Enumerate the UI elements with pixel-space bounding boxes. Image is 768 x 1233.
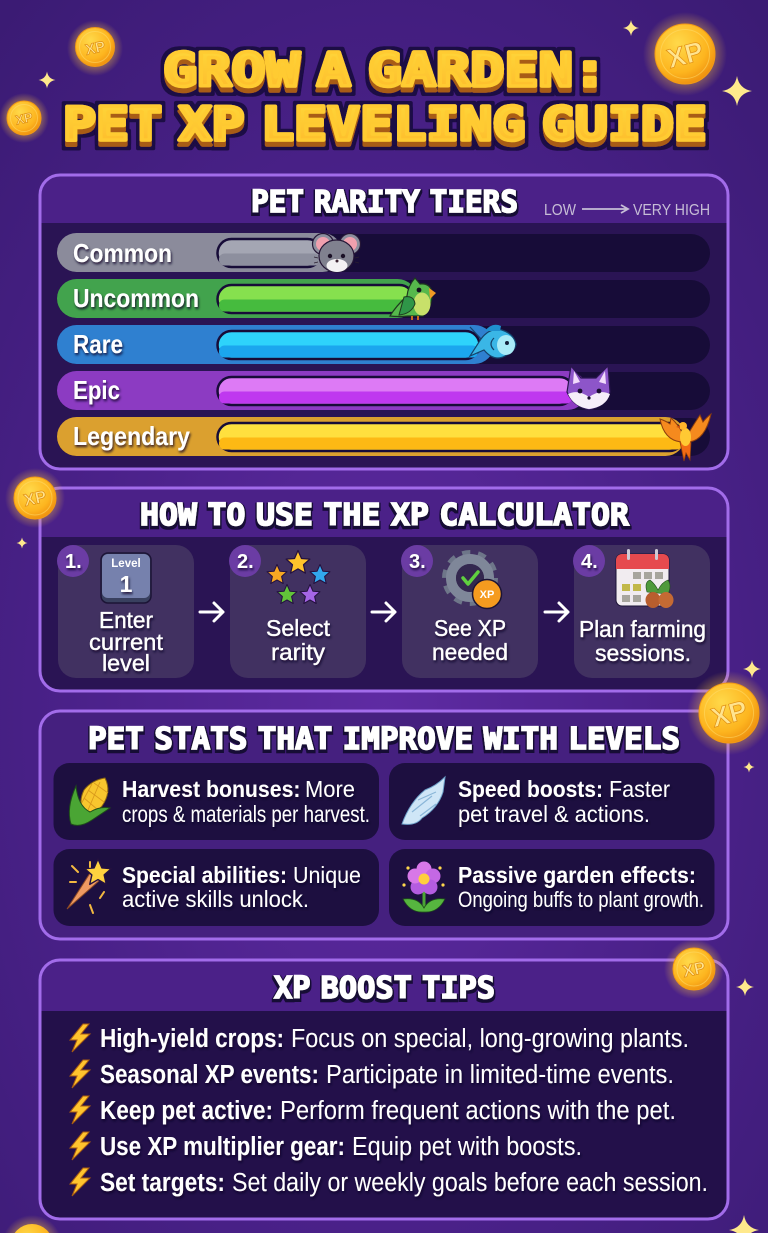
icon: gear with xp badge: XP	[480, 589, 494, 601]
title	[63, 43, 707, 151]
coin: top left	[67, 20, 123, 76]
card: harvest bonuses	[54, 763, 379, 840]
heading: pet stats: PET STATS THAT IMPROVE WITH LEVELS	[88, 722, 680, 757]
icon: mouse	[312, 234, 360, 272]
row: rare	[57, 325, 710, 364]
step 2: select rarity: rarity	[271, 639, 326, 665]
title: GROW A GARDEN:	[163, 43, 607, 97]
scale legend: low to very high	[544, 202, 710, 219]
tip: keep pet active: Keep pet active:	[100, 1097, 273, 1125]
coin: stats panel corner: XP	[708, 695, 751, 733]
coin: top right: XP	[664, 36, 707, 74]
title: PET XP LEVELING GUIDE	[63, 97, 707, 151]
card: speed boosts	[389, 763, 714, 840]
icon: calendar with vegetables	[616, 549, 674, 608]
icon: level card: 1	[120, 571, 133, 597]
coin: bottom left	[2, 1215, 62, 1233]
scale legend: low to very high: VERY HIGH	[633, 202, 710, 219]
tip: high-yield crops: High-yield crops:	[100, 1025, 284, 1053]
heading: pet rarity tiers: PET RARITY TIERS	[251, 185, 518, 220]
icon: corn	[69, 778, 110, 825]
step 2: select rarity: Select	[266, 615, 331, 641]
card: special abilities: Special abilities:	[122, 862, 287, 888]
row: epic	[57, 366, 710, 410]
coin: left of title	[0, 93, 49, 143]
icon: parrot	[390, 278, 436, 320]
row: rare: Rare	[73, 329, 123, 359]
tip: use xp multiplier gear: Use XP multiplier gear:	[100, 1133, 345, 1161]
coin: tips panel corner	[664, 939, 724, 999]
card: speed boosts: pet travel & actions.	[458, 801, 650, 827]
step 3: see xp needed: 3.	[409, 551, 426, 573]
step 2: select rarity	[229, 545, 366, 678]
icon: flower	[402, 862, 445, 912]
tip: keep pet active	[70, 1096, 676, 1125]
arrow: step 3 to 4	[545, 603, 568, 621]
step 4: plan farming sessions	[573, 545, 710, 678]
card: special abilities	[54, 849, 379, 926]
card: speed boosts: Speed boosts:	[458, 776, 603, 802]
icon: stars	[267, 550, 330, 604]
panel: xp boost tips	[40, 960, 728, 1219]
tip: seasonal xp events	[70, 1060, 674, 1089]
coin: top right	[643, 12, 727, 96]
coin: top left: XP	[84, 38, 107, 59]
scale legend: low to very high: LOW	[544, 202, 577, 219]
row: legendary	[57, 414, 711, 461]
step 1: enter current level: level	[102, 650, 150, 676]
tip: seasonal xp events: Participate in limited-time events.	[326, 1061, 674, 1089]
arrow: step 2 to 3	[372, 603, 395, 621]
step 3: see xp needed: needed	[432, 639, 508, 665]
step 4: plan farming sessions: Plan farming	[579, 616, 706, 642]
icon: wing	[402, 777, 445, 824]
card: harvest bonuses: More	[305, 776, 355, 802]
card: special abilities: Unique	[293, 862, 361, 888]
panel: pet rarity tiers	[40, 175, 728, 469]
coin: stats panel corner	[687, 671, 768, 755]
icon: magic wand	[67, 859, 111, 913]
icon: fox	[567, 366, 610, 410]
panel: pet stats that improve with levels	[40, 711, 728, 939]
step 1: enter current level	[57, 545, 194, 678]
heading: how to use: HOW TO USE THE XP CALCULATOR	[140, 498, 630, 533]
step 1: enter current level: 1.	[65, 551, 82, 573]
icon: fish	[470, 325, 516, 358]
step 2: select rarity: 2.	[237, 551, 254, 573]
card: speed boosts: Faster	[609, 776, 670, 802]
card: passive garden effects	[389, 849, 714, 926]
step 3: see xp needed	[401, 545, 538, 678]
card: special abilities: active skills unlock.	[122, 886, 309, 912]
coin: calculator panel corner	[5, 468, 65, 528]
tip: use xp multiplier gear	[70, 1132, 582, 1161]
tip: set targets: Set targets:	[100, 1169, 225, 1197]
row: common	[57, 233, 710, 272]
card: passive garden effects: Passive garden effects:	[458, 862, 696, 888]
heading: xp boost tips: XP BOOST TIPS	[274, 971, 495, 1006]
card: passive garden effects: Ongoing buffs to plant growth.	[458, 887, 704, 912]
tip: use xp multiplier gear: Equip pet with boosts.	[352, 1133, 582, 1161]
tip: set targets	[70, 1168, 708, 1197]
step 1: enter current level: Enter	[99, 607, 153, 633]
tip: set targets: Set daily or weekly goals before each session.	[232, 1169, 708, 1197]
row: legendary: Legendary	[73, 421, 190, 451]
card: harvest bonuses: crops & materials per harvest.	[122, 801, 370, 827]
step 4: plan farming sessions: sessions.	[595, 640, 691, 666]
step 3: see xp needed: See XP	[434, 615, 506, 641]
tip: seasonal xp events: Seasonal XP events:	[100, 1061, 319, 1089]
icon: level card: Level	[111, 558, 141, 570]
card: harvest bonuses: Harvest bonuses:	[122, 776, 300, 802]
tip: keep pet active: Perform frequent actions with the pet.	[280, 1097, 676, 1125]
row: uncommon	[57, 278, 710, 320]
coin: left of title: XP	[14, 109, 34, 128]
arrow: step 1 to 2	[200, 603, 223, 621]
coin: tips panel corner: XP	[681, 958, 707, 981]
icon: level card	[101, 553, 151, 603]
icon: phoenix	[660, 414, 711, 461]
coin: calculator panel corner: XP	[22, 487, 48, 510]
step 1: enter current level: current	[89, 629, 164, 655]
step 4: plan farming sessions: 4.	[581, 551, 598, 573]
tip: high-yield crops	[70, 1024, 689, 1053]
row: epic: Epic	[73, 375, 120, 405]
panel: how to use the xp calculator	[40, 488, 728, 691]
row: uncommon: Uncommon	[73, 283, 199, 313]
row: common: Common	[73, 238, 172, 268]
tip: high-yield crops: Focus on special, long-growing plants.	[291, 1025, 689, 1053]
